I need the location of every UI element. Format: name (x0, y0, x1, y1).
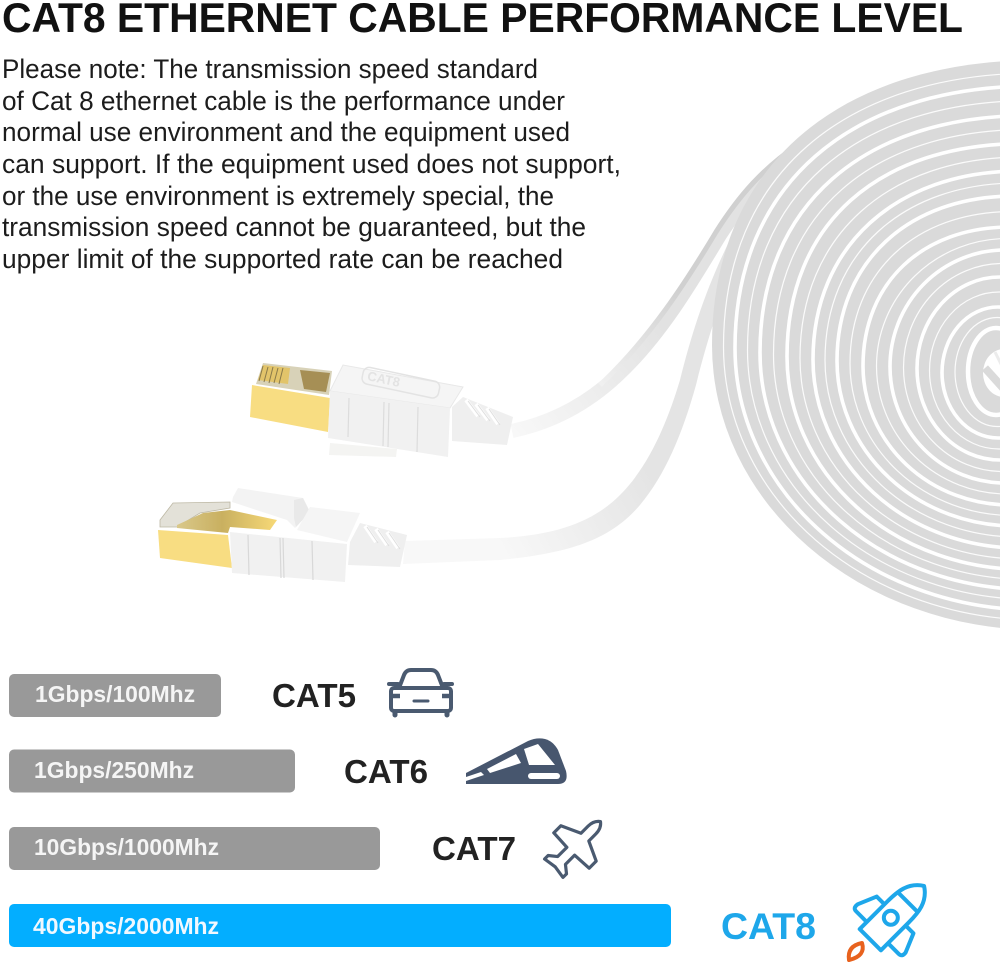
icon: car (389, 670, 452, 715)
category label: CAT5 (272, 677, 356, 714)
cable illustration: lower cable strand (403, 195, 765, 564)
note text block (2, 54, 621, 274)
cable coil spiral (712, 60, 1000, 630)
note text block: or the use environment is extremely special, the (2, 181, 554, 211)
speed bar (9, 750, 295, 792)
connector contacts (256, 363, 332, 395)
note text block: Please note: The transmission speed standard (2, 54, 538, 84)
category label: CAT6 (344, 753, 428, 790)
category label: CAT7 (432, 830, 516, 867)
speed bar (9, 674, 221, 717)
upper RJ45 connector (250, 363, 513, 457)
lower RJ45 connector (158, 488, 407, 582)
connector strain relief (348, 523, 407, 567)
connector body: CAT8 (366, 368, 401, 390)
note text block: can support. If the equipment used does not support, (2, 149, 621, 179)
connector gold shield (250, 385, 330, 432)
cable illustration: upper cable strand (512, 146, 800, 431)
connector gold shield (158, 530, 232, 568)
category label: CAT8 (721, 906, 816, 947)
speed row: CAT7 (9, 804, 618, 886)
connector strain relief (452, 397, 513, 445)
icon: train (466, 738, 567, 784)
note text block: transmission speed cannot be guaranteed, but the (2, 212, 586, 242)
icon: rocket (846, 862, 948, 964)
speed label: 40Gbps/2000Mhz (33, 913, 219, 939)
connector latch (232, 488, 310, 528)
speed bar (9, 904, 671, 947)
connector contacts (160, 502, 230, 527)
speed row: CAT6 (9, 738, 567, 792)
connector gold top (177, 510, 277, 533)
speed label: 1Gbps/250Mhz (34, 757, 194, 783)
note text block: of Cat 8 ethernet cable is the performance under (2, 86, 565, 116)
icon: airplane (536, 804, 618, 886)
speed row: CAT5 (9, 670, 452, 717)
speed row: CAT8 (9, 862, 948, 964)
note text block: normal use environment and the equipment used (2, 117, 570, 147)
connector body (328, 365, 463, 457)
speed label: 10Gbps/1000Mhz (34, 834, 219, 860)
speed label: 1Gbps/100Mhz (35, 681, 195, 707)
connector body (230, 507, 360, 582)
speed bar (9, 827, 380, 870)
note text block: upper limit of the supported rate can be reached (2, 244, 563, 274)
